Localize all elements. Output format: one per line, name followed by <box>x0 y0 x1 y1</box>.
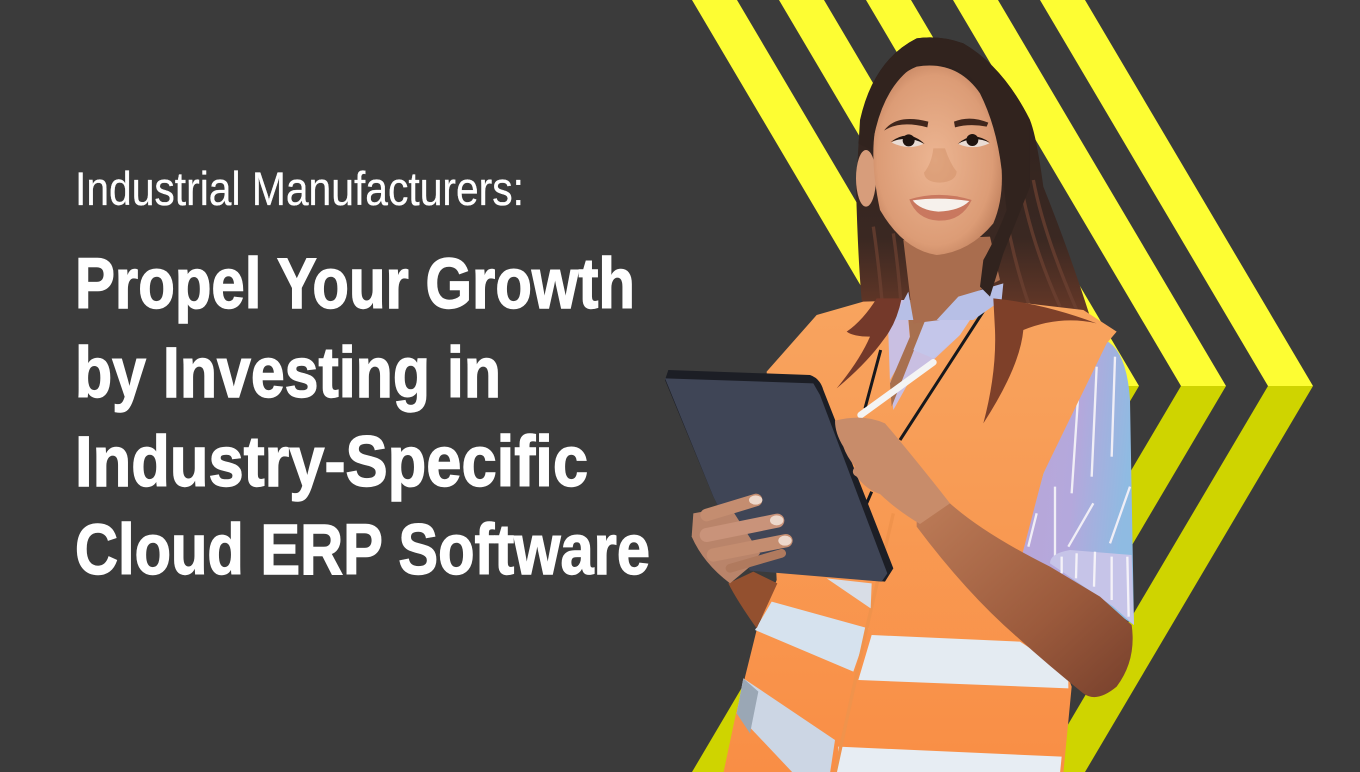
right forearm <box>917 502 1133 697</box>
eyebrows <box>884 119 988 131</box>
neck <box>903 237 1000 323</box>
subtitle: Industrial Manufacturers: <box>75 162 524 215</box>
shirt at collar <box>893 283 1003 320</box>
title: Propel Your Growth <box>75 245 635 324</box>
shirt sleeve <box>1022 340 1134 625</box>
left forearm <box>728 572 777 628</box>
lanyard <box>865 300 991 503</box>
title <box>75 245 650 590</box>
white shirt tip <box>827 578 872 608</box>
face <box>873 66 1002 255</box>
title: Cloud ERP Software <box>75 511 650 590</box>
head <box>856 37 1030 323</box>
nose <box>924 148 957 183</box>
hair back <box>856 37 1090 323</box>
left hand <box>692 495 792 583</box>
hair top and front <box>858 37 1030 297</box>
person: worker in orange vest holding a tablet <box>665 37 1134 772</box>
vest <box>723 298 1117 772</box>
vest placket <box>835 513 893 772</box>
vest reflective bands <box>737 602 1068 772</box>
title: by Investing in <box>75 334 501 413</box>
title: Industry-Specific <box>75 423 588 502</box>
right hand <box>835 418 950 524</box>
hair strands over vest <box>837 298 1097 423</box>
stylus pen <box>861 362 933 415</box>
tablet <box>665 370 893 582</box>
shirt collar <box>888 300 983 410</box>
chevron stripes <box>692 0 1313 772</box>
eyes <box>891 134 990 147</box>
body, vest and arms <box>665 298 1134 772</box>
ear <box>856 150 876 207</box>
smile <box>909 195 972 221</box>
